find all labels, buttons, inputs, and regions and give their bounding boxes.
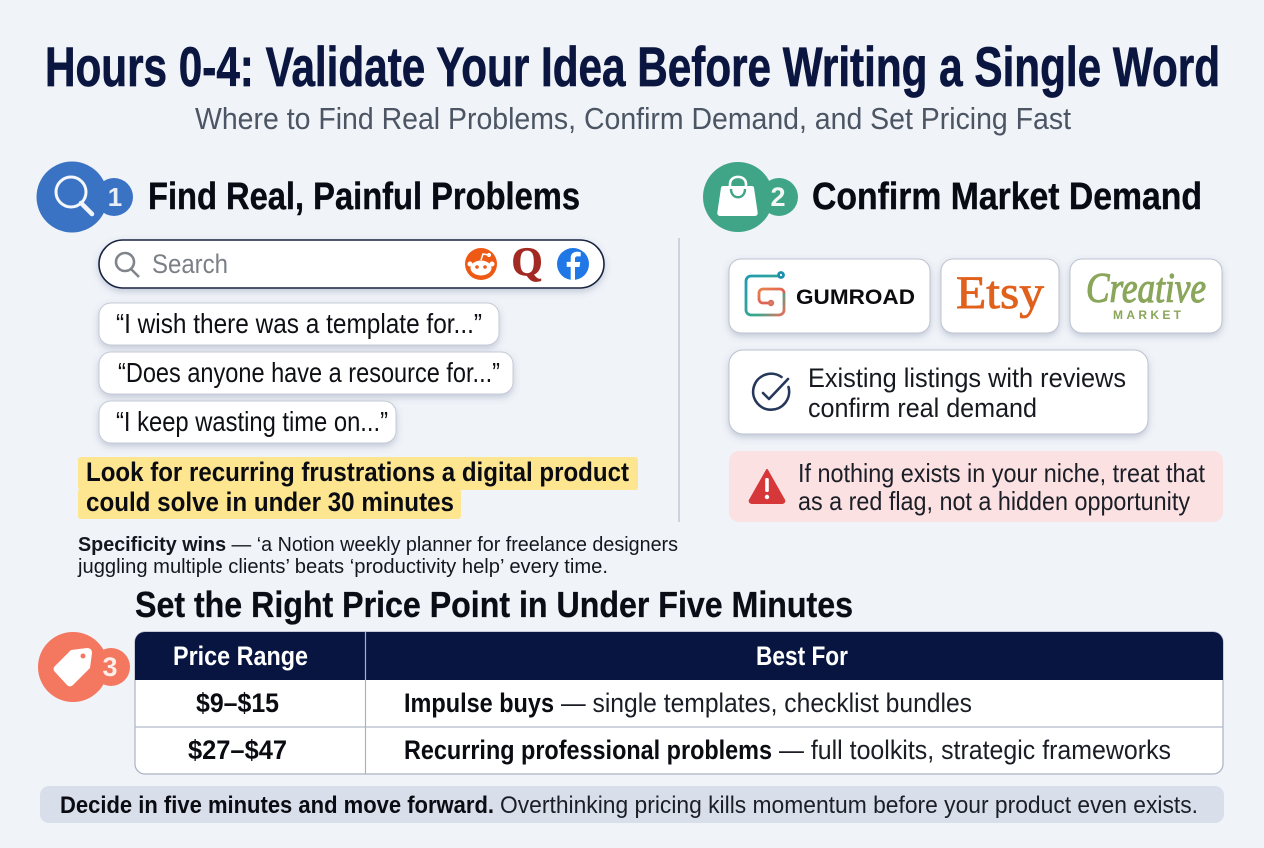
quote pill 1: “I wish there was a template for...” <box>116 308 482 339</box>
card: creative market: Creative <box>1086 266 1206 312</box>
table header <box>173 641 848 671</box>
table row 2: Recurring professional problems <box>404 735 772 765</box>
icon: price tag badge 3 <box>38 632 130 702</box>
card: creative market: MARKET <box>1113 308 1182 322</box>
icon: gumroad logo <box>746 272 784 315</box>
card: etsy <box>941 259 1059 333</box>
icon: magnifier badge 1: 1 <box>108 182 122 212</box>
card: demand confirmation: Existing listings with reviews <box>808 363 1126 393</box>
icon: price tag badge 3: 3 <box>102 652 118 682</box>
table row 1 <box>196 688 972 718</box>
panel: confirm market demand <box>703 162 1223 522</box>
table row 1: — single templates, checklist bundles <box>561 688 972 718</box>
warning callout: as a red flag, not a hidden opportunity <box>798 486 1190 516</box>
icon: shopping bag badge 2: 2 <box>770 182 786 212</box>
table header: Price Range <box>173 641 308 671</box>
table header: Best For <box>756 641 848 671</box>
card: demand confirmation <box>729 350 1148 434</box>
table row 1: $9–$15 <box>196 688 279 718</box>
card: gumroad: GUMROAD <box>796 286 915 309</box>
card: demand confirmation: confirm real demand <box>808 393 1037 423</box>
table row 2: $27–$47 <box>188 735 287 765</box>
quote pill 2 <box>99 352 513 394</box>
card: creative market <box>1070 259 1222 333</box>
heading: find real problems: Find Real, Painful Problems <box>148 176 580 218</box>
specificity note: juggling multiple clients’ beats ‘productivity help’ every time. <box>77 556 608 578</box>
icon: search <box>116 253 139 277</box>
specificity note: Specificity wins — ‘a Notion weekly planner for freelance designers <box>78 534 678 556</box>
footer banner <box>40 786 1224 823</box>
quote pill 3 <box>99 401 396 443</box>
icon: check <box>753 374 789 410</box>
icon: warning triangle <box>750 470 784 503</box>
footer banner: Overthinking pricing kills momentum before your product even exists. <box>500 792 1198 819</box>
search bar <box>99 239 604 288</box>
card: gumroad <box>729 259 930 333</box>
pricing table <box>135 632 1223 774</box>
search bar: Search <box>152 249 228 279</box>
heading: price point: Set the Right Price Point in Under Five Minutes <box>135 584 853 625</box>
specificity note <box>77 534 678 578</box>
icon: quora: Q <box>511 239 543 284</box>
table row 1: Impulse buys <box>404 688 554 718</box>
panel: price point <box>38 584 1224 823</box>
icon: shopping bag badge 2 <box>703 162 798 232</box>
quote pill 2: “Does anyone have a resource for...” <box>118 357 500 388</box>
highlighted callout: could solve in under 30 minutes <box>86 487 454 517</box>
icon: reddit <box>465 248 497 280</box>
highlighted callout <box>78 457 638 519</box>
table row 2 <box>188 735 1171 765</box>
footer banner: Decide in five minutes and move forward. <box>60 792 494 819</box>
card: etsy: Etsy <box>956 267 1045 319</box>
quote pill 1 <box>99 303 499 345</box>
panel: find real problems <box>36 162 678 578</box>
highlighted callout: Look for recurring frustrations a digital product <box>86 457 629 487</box>
icon: facebook <box>557 248 589 280</box>
heading: confirm market demand: Confirm Market Demand <box>812 176 1202 218</box>
icon: magnifier badge 1 <box>36 162 133 232</box>
table row 2: — full toolkits, strategic frameworks <box>779 735 1171 765</box>
warning callout: If nothing exists in your niche, treat that <box>798 458 1206 488</box>
quote pill 3: “I keep wasting time on...” <box>116 406 388 437</box>
warning callout <box>729 451 1223 522</box>
subtitle: Where to Find Real Problems, Confirm Demand, and Set Pricing Fast <box>195 101 1071 136</box>
